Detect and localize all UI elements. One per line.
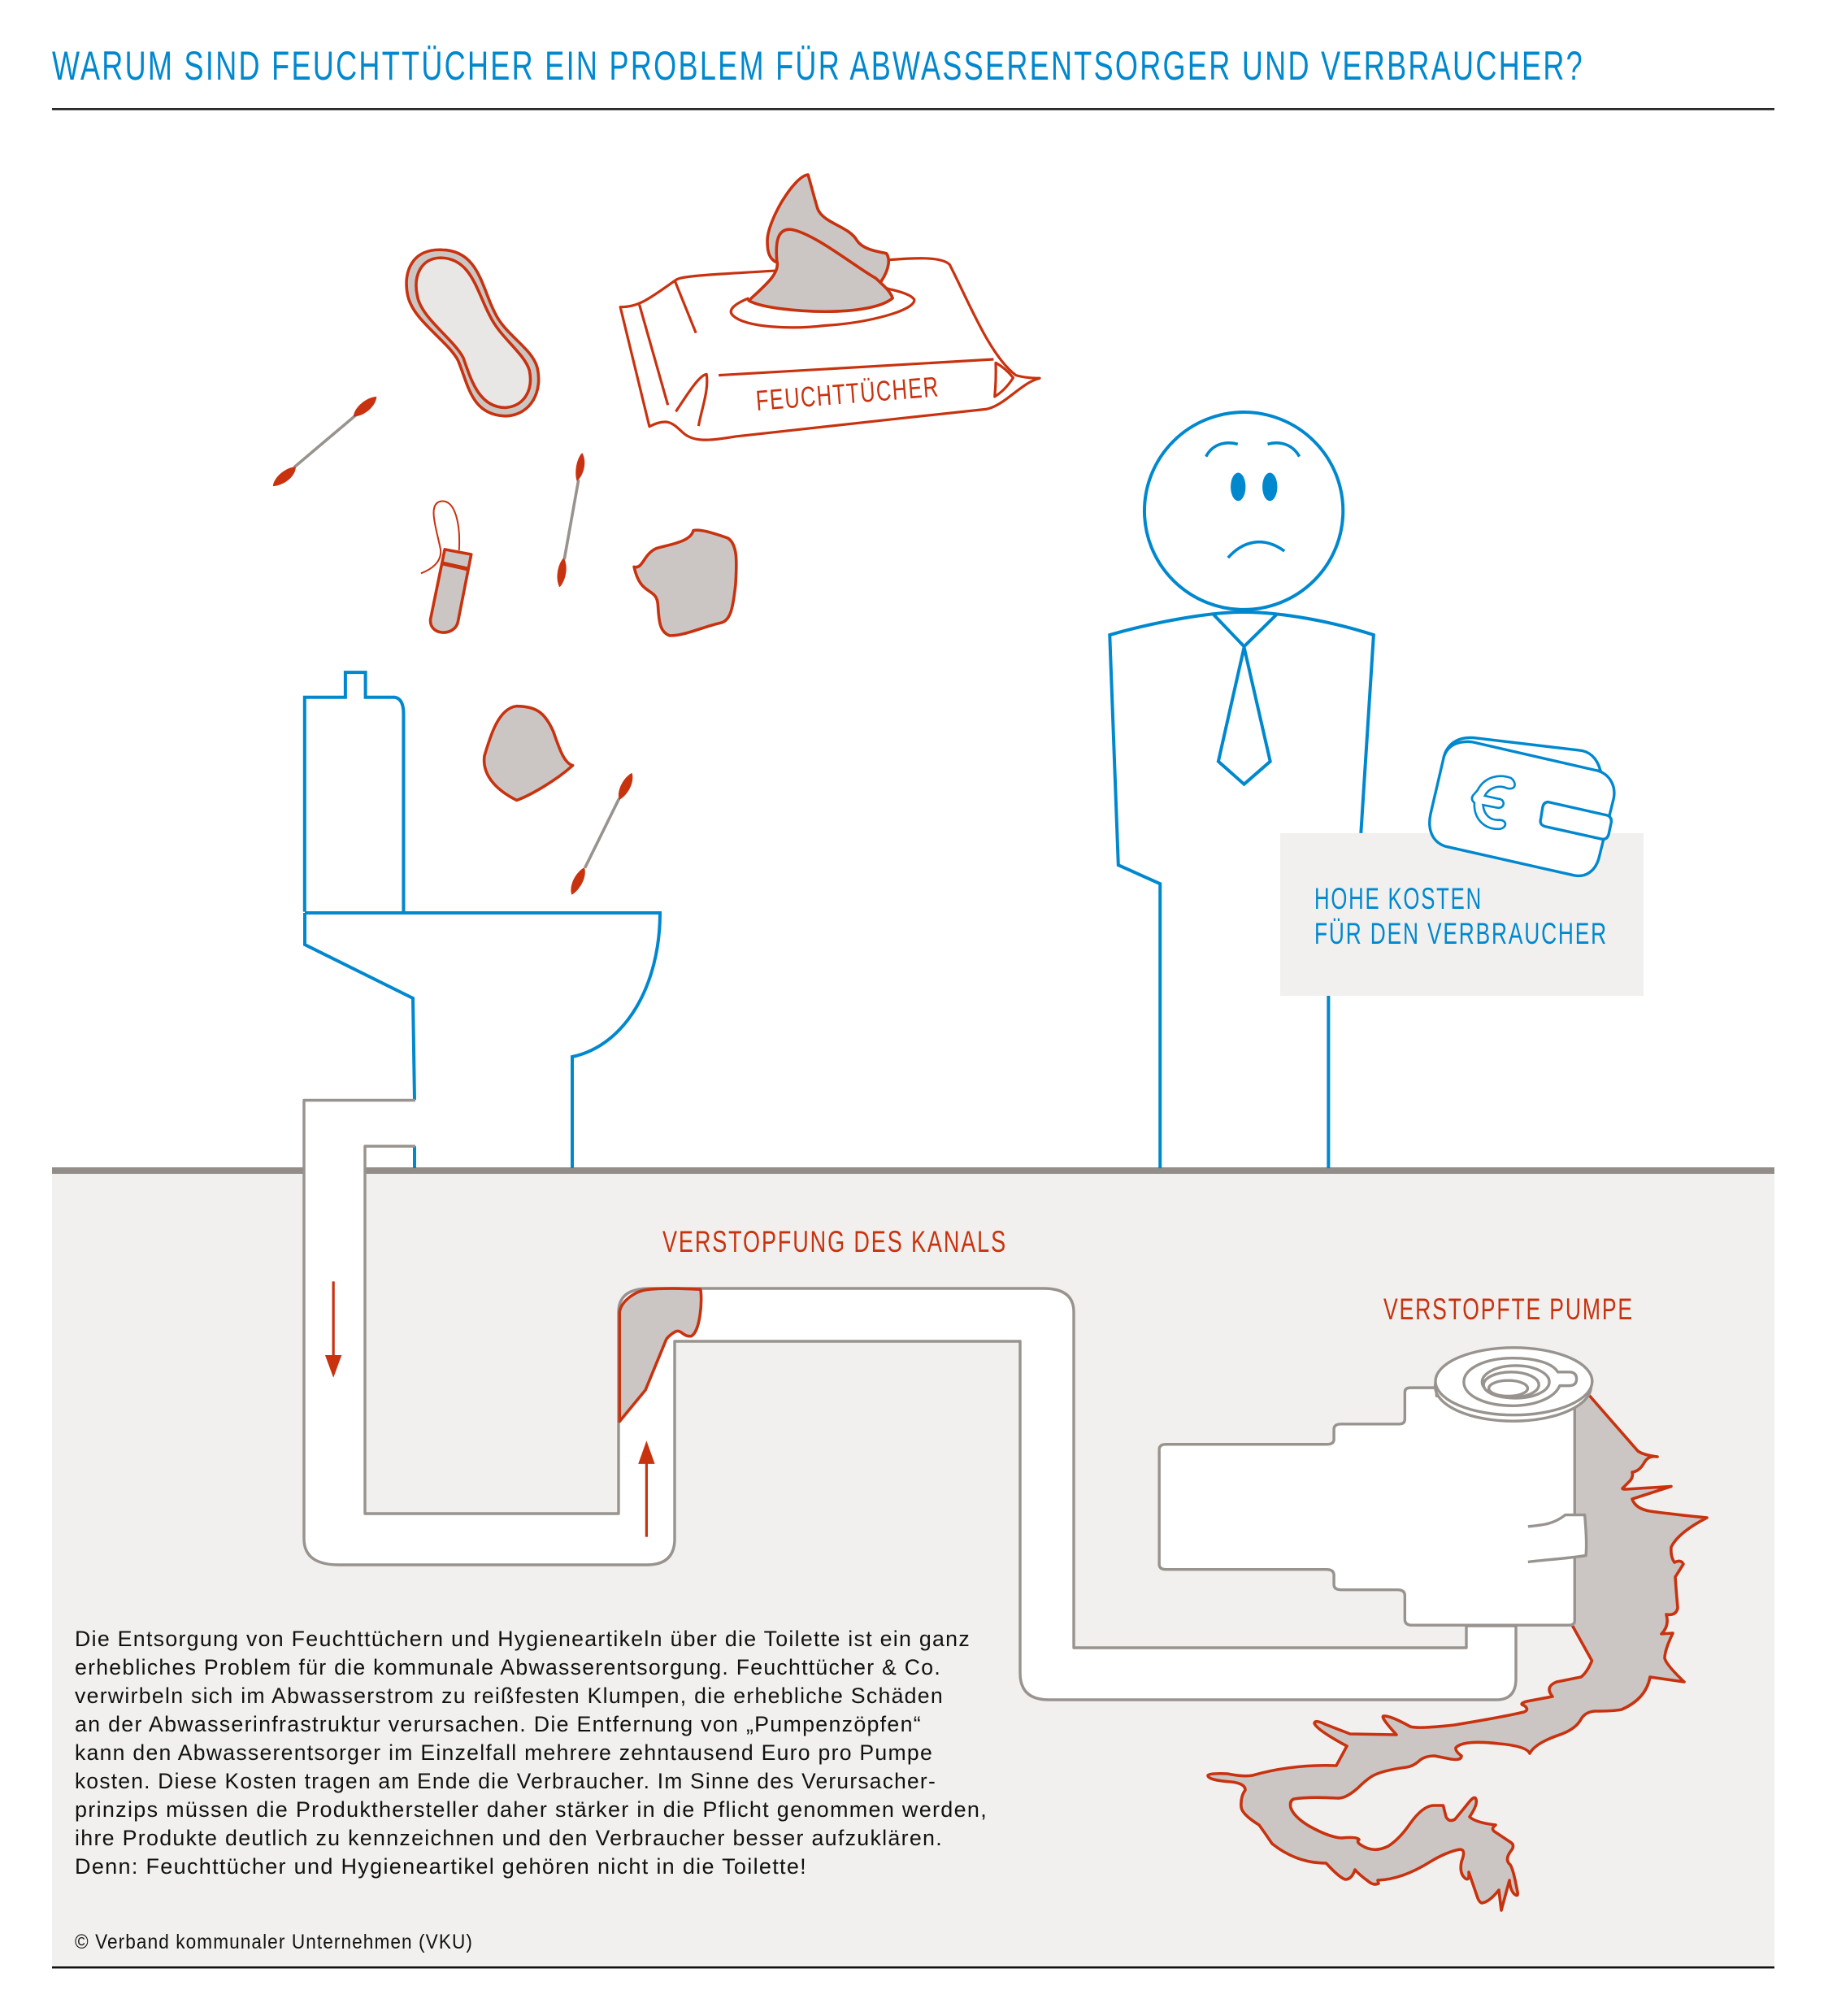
head [1144,412,1343,610]
label: clogged pump: VERSTOPFTE PUMPE [1383,1293,1634,1326]
clog [619,1288,701,1422]
icon: cotton swab lower [571,773,632,895]
icon: sanitary pad [406,250,539,416]
illustration: pump [1159,1348,1592,1625]
illustration: falling hygiene items [273,175,1040,912]
copyright: © Verband kommunaler Unternehmen (VKU) [75,1931,473,1953]
icon: toilet bowl [305,913,660,1168]
text block: explanation: ihre Produkte deutlich zu kennzeichnen und den Verbraucher besser aufzuklären. [75,1826,943,1850]
text block: explanation: prinzips müssen die Produkthersteller daher stärker in die Pflicht genommen werden, [75,1797,988,1822]
icon: toilet tank [305,672,403,912]
collar and tie [1213,613,1277,784]
illustration: sewage pipe [304,1101,1516,1700]
icon: wallet with euro sign [1430,737,1614,875]
label: clogged channel: VERSTOPFUNG DES KANALS [662,1225,1007,1258]
text block: explanation: Die Entsorgung von Feuchttüchern und Hygieneartikeln über die Toilette ist ein ganz [75,1627,971,1651]
callout: high costs for the consumer [1280,833,1644,996]
illustration: sewer clog and flow arrows [325,1281,701,1537]
text block: explanation: kann den Abwasserentsorger im Einzelfall mehrere zehntausend Euro pro Pumpe [75,1740,933,1765]
body [1110,612,1374,1168]
icon: wet wipes package [620,175,1040,440]
icon: wet wipe clump lower [484,706,573,800]
text block: explanation: an der Abwasserinfrastruktur verursachen. Die Entfernung von „Pumpenzöpfen“ [75,1712,922,1736]
pump flange [1435,1348,1592,1421]
icon: cotton swab left [273,397,376,486]
pump handle [1528,1515,1587,1562]
panel: underground background [52,1171,1774,1967]
text block: explanation [75,1627,988,1879]
icon: cotton swab centre [558,453,584,587]
arrow: flow down [325,1281,341,1378]
icon: tampon [421,501,471,632]
text block: explanation: erhebliches Problem für die kommunale Abwasserentsorgung. Feuchttücher & Co. [75,1655,941,1679]
face [1206,443,1300,558]
text block: explanation: Denn: Feuchttücher und Hygieneartikel gehören nicht in die Toilette! [75,1854,807,1879]
figure: worried consumer [1110,412,1374,1168]
callout text line 1: HOHE KOSTEN [1314,882,1483,915]
icon: wet wipe clump upper [634,530,736,636]
callout text line 2: FÜR DEN VERBRAUCHER [1314,917,1608,950]
arrow: flow up [638,1440,655,1537]
text block: explanation: verwirbeln sich im Abwasserstrom zu reißfesten Klumpen, die erhebliche Schäden [75,1684,944,1708]
illustration: pump braid of wipes [1208,1396,1707,1910]
pump body [1159,1388,1574,1625]
label: wipes package: FEUCHTTÜCHER [755,371,940,417]
text block: explanation: kosten. Diese Kosten tragen am Ende die Verbraucher. Im Sinne des Verursacher- [75,1769,936,1793]
